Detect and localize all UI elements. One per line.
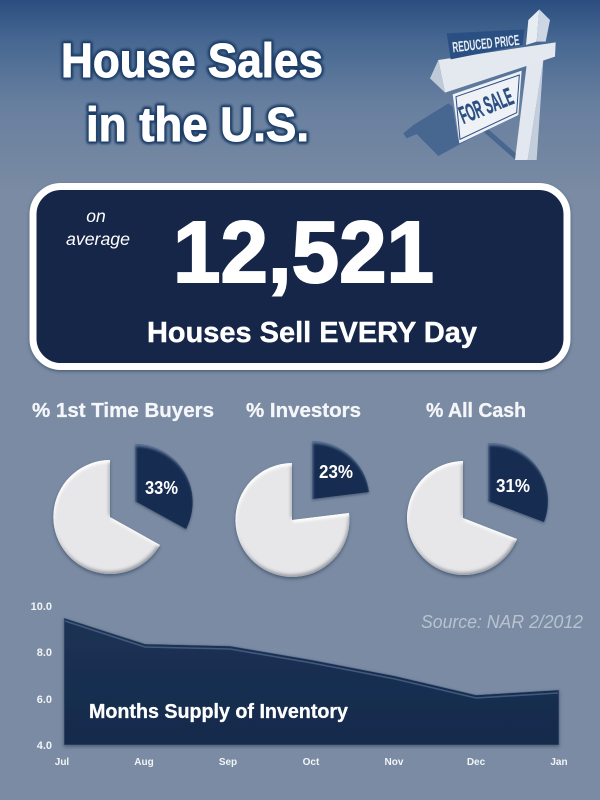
pie chart: 1st time buyers 33%: 33% xyxy=(145,478,178,498)
x axis labels: Oct xyxy=(303,757,320,768)
for sale board: FOR SALE xyxy=(455,84,518,130)
on average note xyxy=(66,206,130,249)
pie heading: all cash: % All Cash xyxy=(426,399,526,422)
chart area xyxy=(64,618,559,745)
reduced price rider: REDUCED PRICE xyxy=(452,33,520,56)
for sale board xyxy=(453,71,522,143)
reduced price rider xyxy=(447,29,524,59)
pie heading: investors: % Investors xyxy=(246,399,361,422)
sign arm xyxy=(430,42,556,93)
pie chart: 1st time buyers 33% xyxy=(53,444,193,574)
x axis labels: Aug xyxy=(134,757,154,768)
x axis labels: Dec xyxy=(467,757,486,768)
pie chart: all cash 31% xyxy=(407,443,548,575)
pie chart: investors 23% xyxy=(235,441,369,577)
pie heading: 1st time buyers: % 1st Time Buyers xyxy=(32,399,214,422)
pie chart: investors 23%: 23% xyxy=(319,462,353,482)
source note: Source: NAR 2/2012 xyxy=(421,612,583,632)
on average note: on xyxy=(86,206,106,226)
x axis labels: Sep xyxy=(219,757,237,768)
sign shadow xyxy=(403,103,523,160)
y axis labels: 6.0 xyxy=(37,694,52,706)
y axis labels: 8.0 xyxy=(37,647,52,659)
icon: for sale sign xyxy=(403,9,556,160)
panel caption: Houses Sell EVERY Day xyxy=(147,317,477,349)
area chart: months supply of inventory xyxy=(31,601,568,768)
y axis labels: 10.0 xyxy=(31,601,52,613)
big number: 12,521 xyxy=(173,204,434,301)
title: House Sales xyxy=(61,35,323,88)
title xyxy=(61,35,323,152)
x axis labels: Nov xyxy=(385,757,404,768)
y axis labels: 4.0 xyxy=(37,740,52,752)
x axis labels xyxy=(55,757,568,768)
x axis labels: Jul xyxy=(55,757,69,768)
title: in the U.S. xyxy=(86,99,309,152)
title: in the U.S. xyxy=(86,99,309,152)
chart caption: Months Supply of Inventory xyxy=(89,701,349,723)
pie chart: all cash 31%: 31% xyxy=(496,476,530,496)
x axis labels: Jan xyxy=(550,757,568,768)
y axis labels xyxy=(31,601,52,752)
panel: daily sales xyxy=(33,186,567,366)
on average note: average xyxy=(66,229,130,249)
sign post xyxy=(515,9,550,160)
title: House Sales xyxy=(61,35,323,88)
